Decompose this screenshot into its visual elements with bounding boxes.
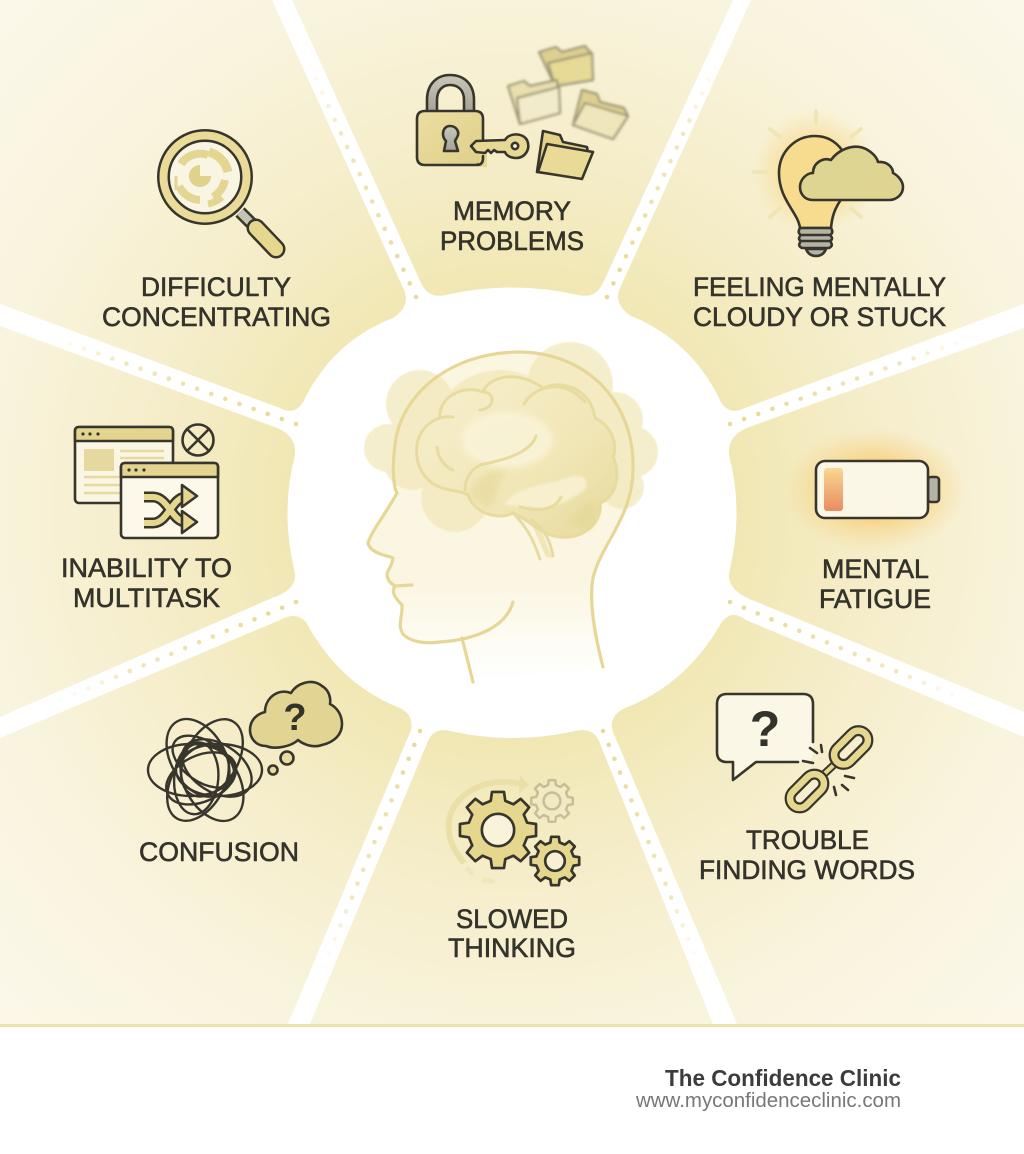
label: FEELING MENTALLY bbox=[693, 272, 946, 302]
icon: thought cloud with question mark: ? bbox=[283, 697, 307, 739]
block: mental fatigue bbox=[783, 428, 967, 614]
fog cloud behind brain bbox=[364, 342, 658, 532]
label bbox=[102, 272, 331, 332]
block: trouble finding words bbox=[699, 694, 915, 885]
label: PROBLEMS bbox=[440, 226, 584, 256]
footer divider bbox=[0, 1024, 1024, 1027]
block: confusion bbox=[139, 682, 342, 867]
label: CONFUSION bbox=[139, 837, 299, 867]
panel: mental fatigue background bbox=[729, 328, 1024, 712]
icon: overlapping windows with shuffle bbox=[75, 424, 218, 538]
label bbox=[699, 825, 915, 885]
icon: open folder bbox=[537, 131, 593, 179]
label: MULTITASK bbox=[73, 583, 220, 613]
block: feeling mentally cloudy or stuck bbox=[693, 110, 946, 332]
label: FATIGUE bbox=[819, 584, 931, 614]
panel: memory problems background bbox=[292, 0, 733, 296]
panel: inability to multitask background bbox=[0, 326, 295, 717]
block: difficulty concentrating bbox=[102, 136, 331, 332]
block: memory problems bbox=[417, 46, 628, 256]
label: MENTAL bbox=[822, 554, 929, 584]
icon: low battery bbox=[783, 428, 967, 552]
panel: trouble finding words background bbox=[612, 615, 1024, 1024]
label: CONCENTRATING bbox=[102, 302, 331, 332]
label: INABILITY TO bbox=[61, 553, 232, 583]
panel: mentally cloudy background bbox=[618, 0, 1024, 411]
footer: clinic name and url: The Confidence Clinic bbox=[665, 1065, 901, 1091]
label bbox=[61, 553, 232, 613]
label bbox=[693, 272, 946, 332]
block: inability to multitask bbox=[61, 424, 232, 613]
icon: magnifying glass bbox=[164, 136, 276, 249]
icon: speech bubble with question mark bbox=[717, 694, 813, 780]
footer: clinic name and url: www.myconfidenceclinic.com bbox=[635, 1090, 901, 1112]
icon: light bulb with cloud bbox=[753, 110, 903, 256]
icon: turning gears bbox=[449, 775, 579, 885]
head outline bbox=[368, 352, 633, 682]
label: CLOUDY OR STUCK bbox=[693, 302, 946, 332]
central head and brain illustration bbox=[364, 342, 658, 682]
panel: confusion background bbox=[0, 616, 412, 1024]
label: THINKING bbox=[448, 933, 576, 963]
icon: tangled scribble bbox=[148, 708, 262, 832]
brain bbox=[417, 377, 617, 559]
label: TROUBLE bbox=[746, 825, 869, 855]
icon: padlock and key bbox=[417, 75, 528, 167]
label: DIFFICULTY bbox=[141, 272, 291, 302]
block: slowed thinking bbox=[448, 775, 579, 963]
head fill bbox=[368, 352, 633, 682]
icon: blurred scattered folders bbox=[508, 46, 628, 139]
label bbox=[819, 554, 931, 614]
icon: speech bubble with question mark: ? bbox=[750, 701, 780, 757]
panel: slowed thinking background bbox=[310, 730, 713, 1024]
icon: thought cloud with question mark bbox=[250, 682, 342, 774]
footer: clinic name and url bbox=[635, 1065, 901, 1112]
label bbox=[440, 196, 584, 256]
label: MEMORY bbox=[453, 196, 571, 226]
label: FINDING WORDS bbox=[699, 855, 915, 885]
label bbox=[448, 904, 576, 963]
label: SLOWED bbox=[456, 904, 568, 934]
icon: broken chain link bbox=[786, 727, 872, 812]
panel: difficulty concentrating background bbox=[0, 0, 406, 411]
